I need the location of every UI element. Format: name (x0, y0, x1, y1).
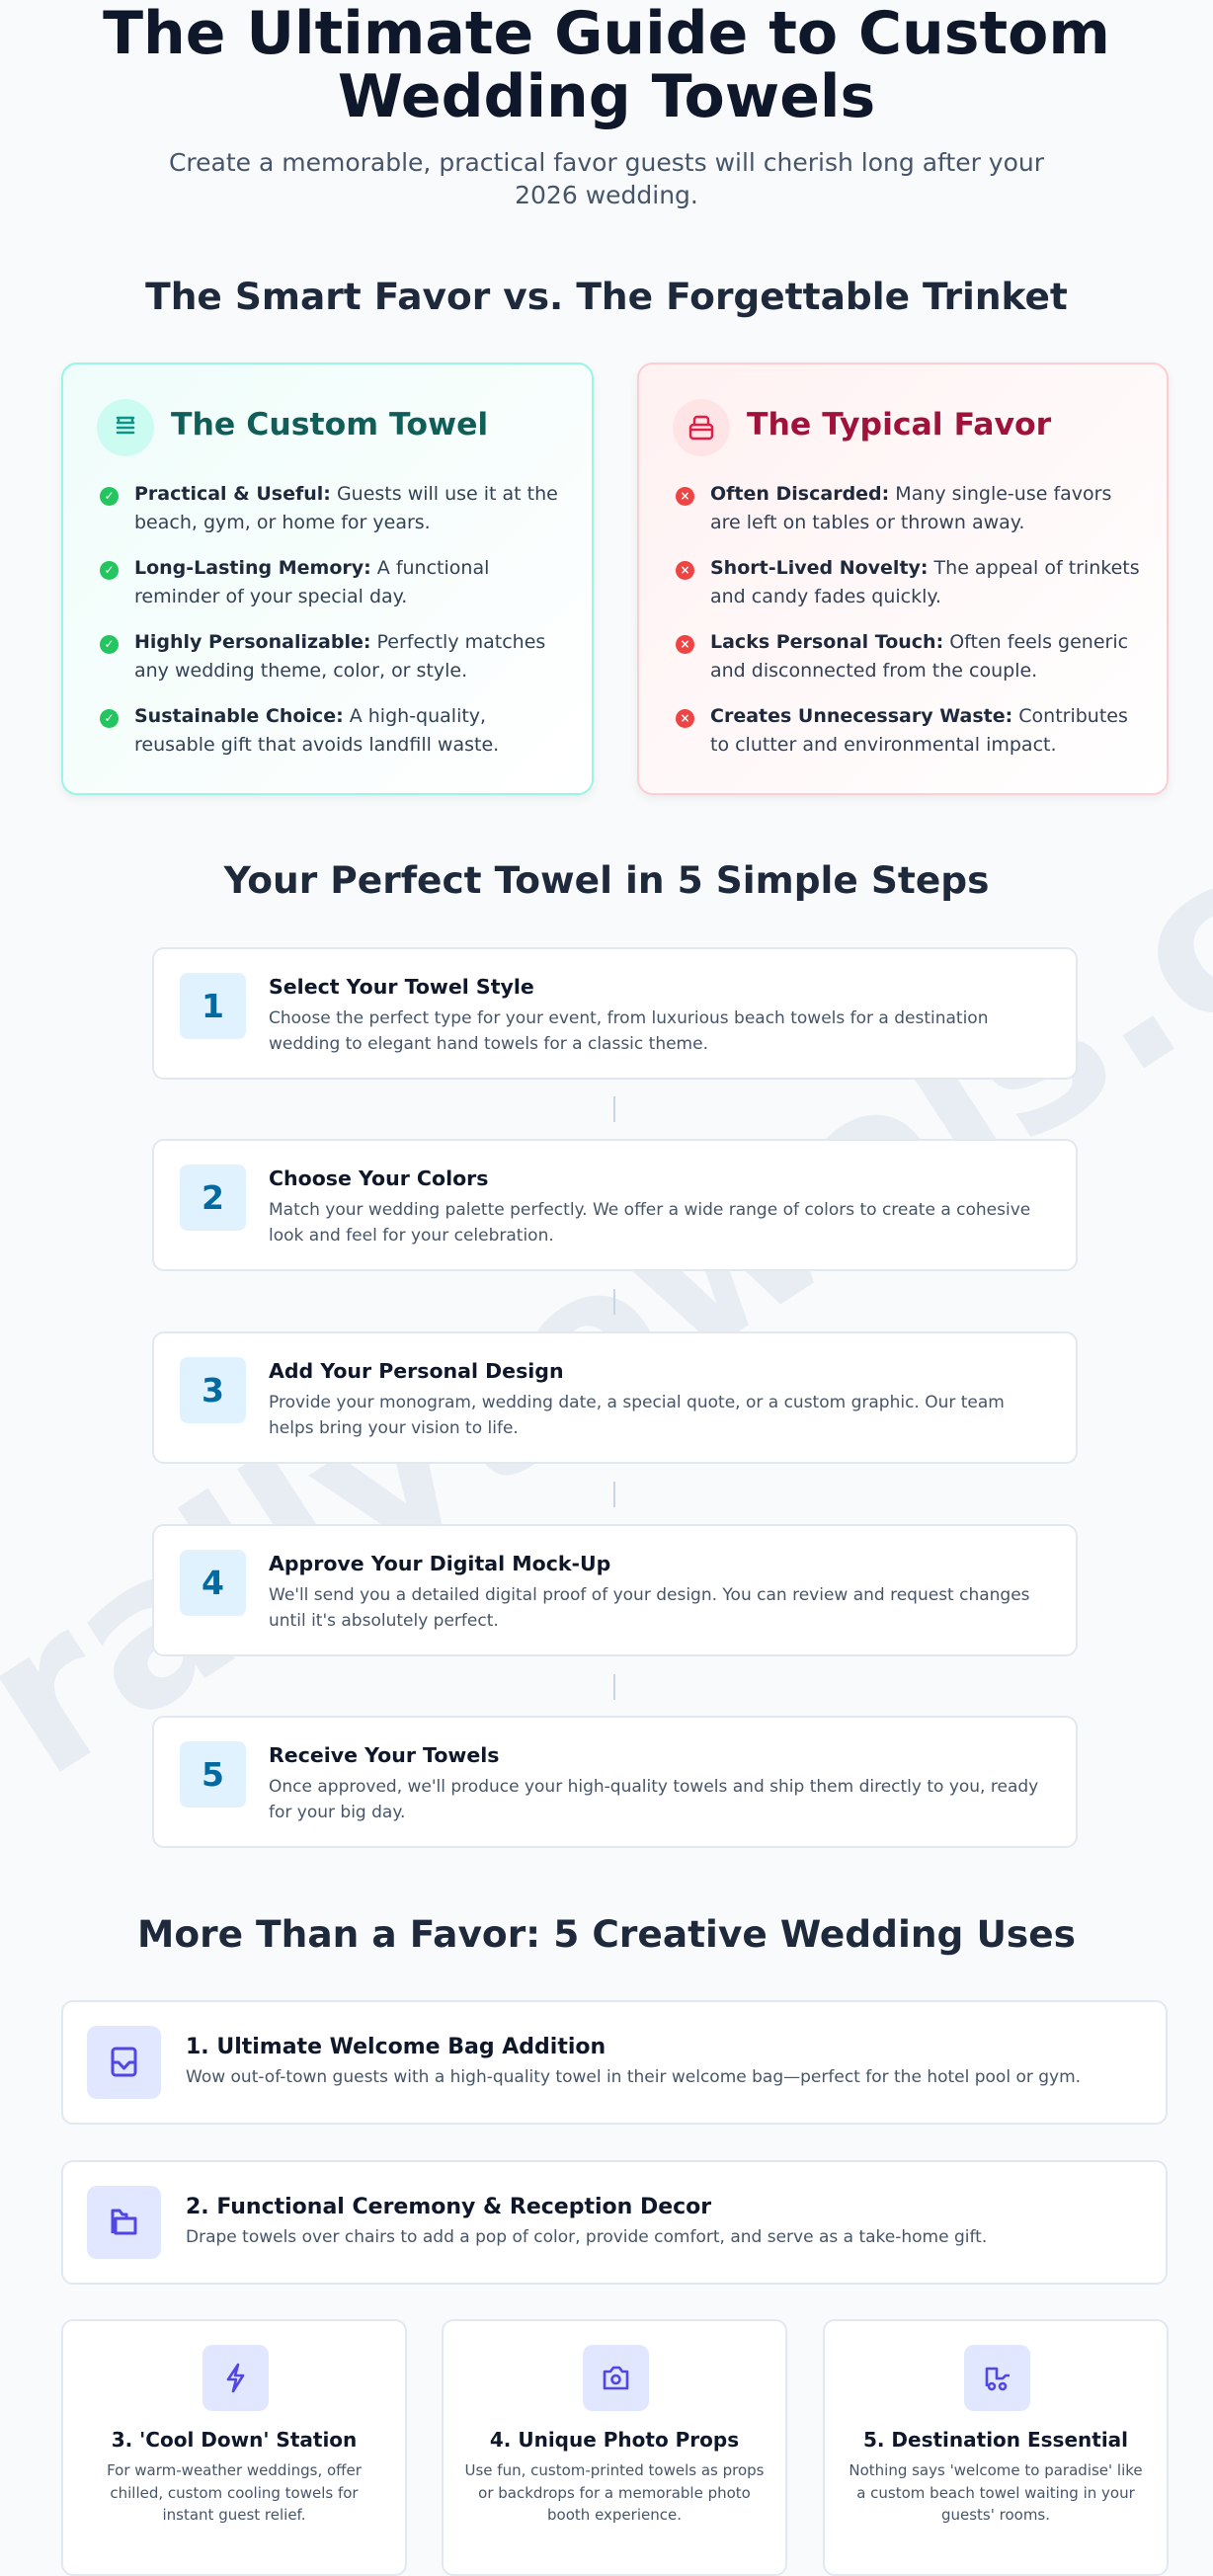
connector (613, 1482, 615, 1507)
panel title: The Typical Favor (747, 407, 1051, 443)
title (103, 0, 1110, 131)
icon: jar (673, 399, 730, 456)
step 3 (152, 1331, 1078, 1464)
icon: bolt (202, 2345, 269, 2411)
connector (613, 1096, 615, 1122)
step 2: 2 (202, 1178, 224, 1217)
icon: folders (87, 2186, 161, 2259)
step 1: Choose the perfect type for your event, from luxurious beach towels for a destination wedding to elegant hand towels for a classic theme. (269, 1008, 988, 1054)
use 1: 1. Ultimate Welcome Bag Addition (186, 2035, 606, 2059)
item: Practical & Useful: Guests will use it at the beach, gym, or home for years. (134, 483, 558, 533)
icon: camera (583, 2345, 649, 2411)
step 5: Receive Your Towels (269, 1743, 499, 1767)
step 4: Approve Your Digital Mock-Up (269, 1552, 610, 1575)
item: × (680, 711, 690, 725)
use 1: Wow out-of-town guests with a high-quality towel in their welcome bag—perfect for the hotel pool or gym. (186, 2067, 1081, 2087)
panel: custom towel (61, 362, 594, 795)
icon: inbox (87, 2026, 161, 2099)
use 5: Nothing says 'welcome to paradise' like a custom beach towel waiting in your guests' rooms. (849, 2461, 1143, 2524)
step 4: We'll send you a detailed digital proof of your design. You can review and request changes until it's absolutely perfect. (269, 1585, 1030, 1631)
step 3: Provide your monogram, wedding date, a special quote, or a custom graphic. Our team helps bring your vision to life. (269, 1393, 1005, 1438)
use 4 (442, 2319, 787, 2576)
title: The Ultimate Guide to Custom (103, 0, 1110, 68)
use 3: 3. 'Cool Down' Station (112, 2428, 357, 2452)
panel: typical favor (637, 362, 1169, 795)
title: Wedding Towels (338, 62, 875, 131)
step 1: 1 (202, 987, 224, 1025)
use 4: Use fun, custom-printed towels as props or backdrops for a memorable photo booth experience. (464, 2461, 765, 2524)
step 4 (152, 1524, 1078, 1656)
item: Often Discarded: Many single-use favors are left on tables or thrown away. (710, 483, 1111, 533)
icon: towel (97, 399, 154, 456)
item: Highly Personalizable: Perfectly matches any wedding theme, color, or style. (134, 631, 545, 682)
icon: cart (964, 2345, 1030, 2411)
item: Creates Unnecessary Waste: Contributes to clutter and environmental impact. (710, 705, 1128, 756)
heading: steps: Your Perfect Towel in 5 Simple Steps (224, 858, 989, 902)
item: × (680, 637, 690, 651)
item: ✓ (104, 563, 115, 577)
use 3 (61, 2319, 407, 2576)
step 2 (152, 1139, 1078, 1271)
item: ✓ (104, 637, 115, 651)
use 3: For warm-weather weddings, offer chilled, custom cooling towels for instant guest relief. (107, 2461, 362, 2524)
item: ✓ (104, 711, 115, 725)
item: × (680, 489, 690, 503)
heading: uses: More Than a Favor: 5 Creative Wedding Uses (137, 1912, 1076, 1956)
use 2: Drape towels over chairs to add a pop of color, provide comfort, and serve as a take-home gift. (186, 2227, 987, 2247)
item: ✓ (104, 489, 115, 503)
step 3: 3 (202, 1371, 224, 1409)
connector (613, 1674, 615, 1700)
use 5: 5. Destination Essential (863, 2428, 1128, 2452)
step 5: 5 (202, 1755, 224, 1794)
heading: comparison: The Smart Favor vs. The Forgettable Trinket (145, 275, 1068, 318)
item: Long-Lasting Memory: A functional reminder of your special day. (134, 557, 489, 607)
step 3: Add Your Personal Design (269, 1359, 564, 1383)
step 4: 4 (202, 1564, 224, 1602)
step 2: Match your wedding palette perfectly. We offer a wide range of colors to create a cohesive look and feel for your celebration. (269, 1200, 1030, 1246)
step 1 (152, 947, 1078, 1080)
step 5 (152, 1716, 1078, 1848)
use 2 (61, 2160, 1168, 2285)
step 2: Choose Your Colors (269, 1167, 488, 1190)
item: × (680, 563, 690, 577)
step 1: Select Your Towel Style (269, 975, 534, 999)
item: Short-Lived Novelty: The appeal of trinkets and candy fades quickly. (710, 557, 1140, 607)
item: Sustainable Choice: A high-quality, reusable gift that avoids landfill waste. (134, 705, 499, 756)
panel title: The Custom Towel (171, 407, 488, 443)
use 4: 4. Unique Photo Props (490, 2428, 739, 2452)
subtitle: Create a memorable, practical favor guests will cherish long after your 2026 wedding. (169, 148, 1044, 209)
use 1 (61, 2000, 1168, 2125)
connector (613, 1289, 615, 1315)
use 5 (823, 2319, 1169, 2576)
step 5: Once approved, we'll produce your high-quality towels and ship them directly to you, ready for your big day. (269, 1777, 1038, 1822)
use 2: 2. Functional Ceremony & Reception Decor (186, 2195, 711, 2219)
item: Lacks Personal Touch: Often feels generic and disconnected from the couple. (710, 631, 1128, 682)
